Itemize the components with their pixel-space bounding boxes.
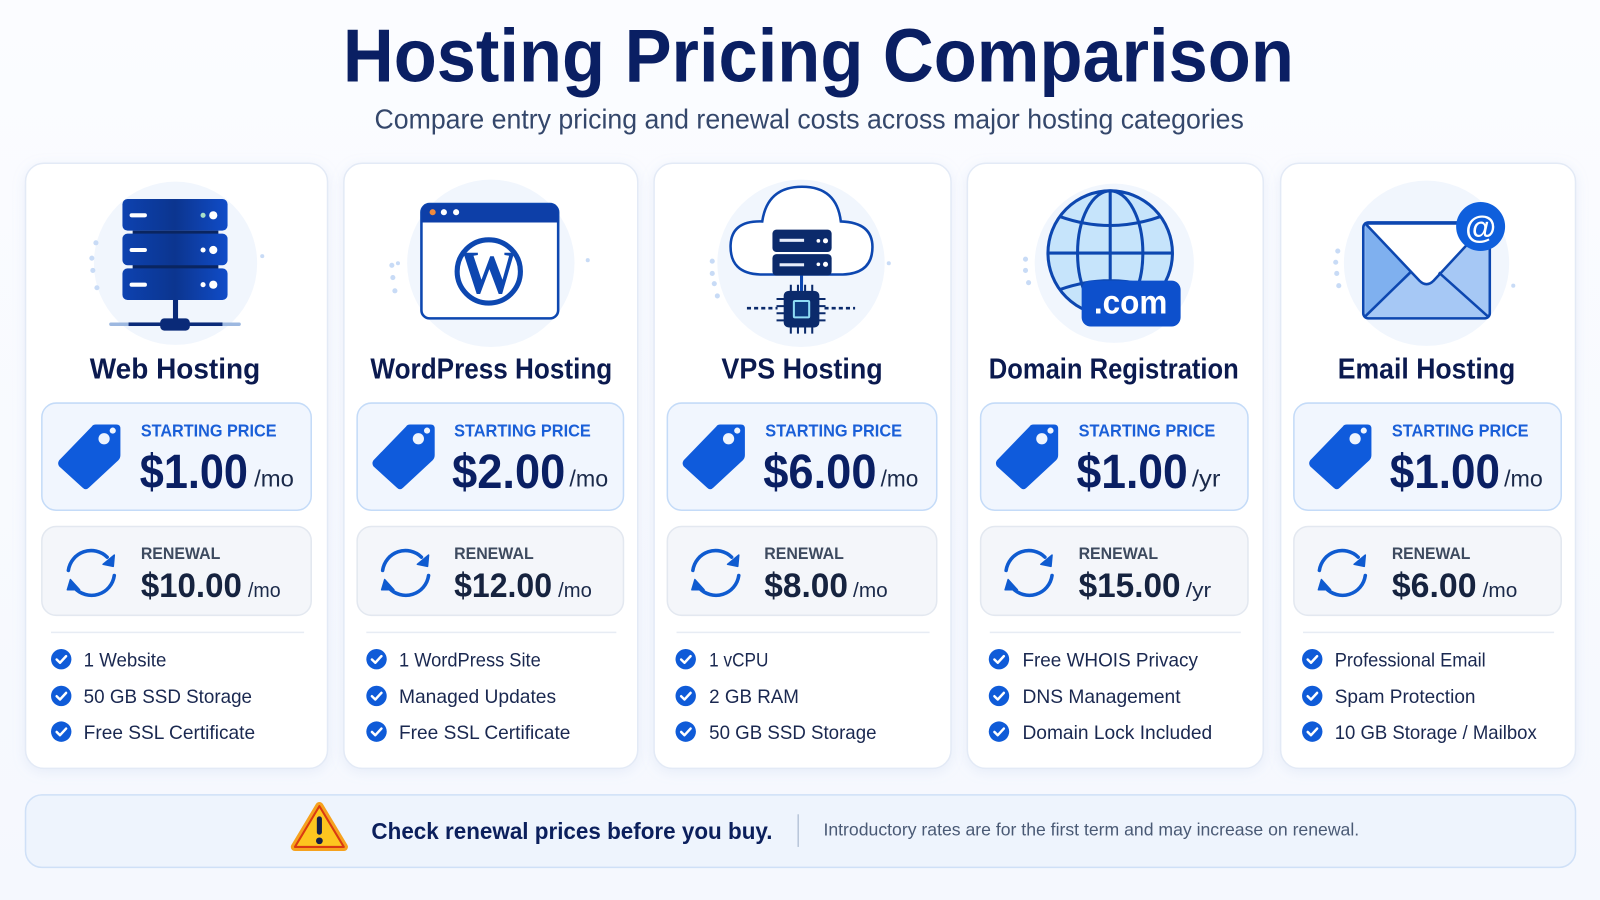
renewal box bbox=[1294, 527, 1561, 615]
renewal box: RENEWAL bbox=[764, 545, 844, 563]
feature list bbox=[51, 649, 255, 744]
starting price box: $6.00 bbox=[763, 446, 877, 499]
icon: envelope with at badge: @ bbox=[1465, 209, 1496, 245]
panel: VPS Hosting bbox=[654, 163, 951, 768]
feature list: 50 GB SSD Storage bbox=[709, 722, 877, 744]
starting price box bbox=[667, 403, 937, 510]
heading: Domain Registration bbox=[989, 354, 1239, 386]
renewal box: /mo bbox=[853, 580, 888, 602]
renewal box bbox=[357, 527, 623, 615]
callout detail: Introductory rates are for the first term and may increase on renewal. bbox=[823, 820, 1359, 840]
feature list bbox=[676, 649, 877, 744]
feature list: Professional Email bbox=[1335, 649, 1486, 671]
heading: VPS Hosting bbox=[721, 354, 883, 386]
starting price box: STARTING PRICE bbox=[1392, 421, 1529, 441]
renewal box: $8.00 bbox=[764, 567, 848, 605]
feature list: 1 Website bbox=[84, 649, 166, 671]
feature list: Domain Lock Included bbox=[1022, 722, 1212, 744]
renewal box: $10.00 bbox=[141, 567, 242, 605]
starting price box: STARTING PRICE bbox=[765, 421, 902, 441]
icon: cloud server and chip bbox=[710, 180, 891, 347]
renewal box: /mo bbox=[248, 580, 281, 602]
starting price box bbox=[42, 403, 311, 510]
feature list: Free SSL Certificate bbox=[84, 722, 255, 744]
callout: renewal warning banner bbox=[26, 795, 1576, 867]
feature list: Free WHOIS Privacy bbox=[1022, 649, 1198, 671]
starting price box: STARTING PRICE bbox=[1079, 421, 1215, 441]
feature list bbox=[366, 649, 570, 744]
renewal box: $15.00 bbox=[1079, 567, 1181, 605]
renewal box bbox=[42, 527, 311, 615]
feature list: Spam Protection bbox=[1335, 686, 1476, 708]
starting price box: /mo bbox=[569, 466, 608, 492]
starting price box: $1.00 bbox=[1077, 446, 1188, 499]
subtitle: Compare entry pricing and renewal costs across major hosting categories bbox=[374, 104, 1244, 135]
starting price box bbox=[981, 403, 1248, 510]
feature list bbox=[989, 649, 1212, 744]
panel: Email Hosting bbox=[1281, 163, 1576, 768]
panel: Domain Registration bbox=[967, 163, 1263, 768]
renewal box: /yr bbox=[1186, 580, 1211, 602]
starting price box bbox=[1294, 403, 1561, 510]
feature list: Free SSL Certificate bbox=[399, 722, 570, 744]
starting price box: $2.00 bbox=[452, 446, 565, 499]
heading: Web Hosting bbox=[90, 354, 260, 386]
renewal box: RENEWAL bbox=[1392, 545, 1470, 563]
renewal box: RENEWAL bbox=[454, 545, 534, 563]
starting price box: STARTING PRICE bbox=[454, 421, 591, 441]
renewal box bbox=[981, 527, 1248, 615]
renewal box: $12.00 bbox=[454, 567, 552, 605]
starting price box: STARTING PRICE bbox=[141, 421, 277, 441]
icon: globe with .com badge bbox=[1023, 184, 1194, 343]
starting price box: /mo bbox=[881, 466, 918, 492]
feature list: DNS Management bbox=[1022, 686, 1181, 708]
icon: warning triangle bbox=[295, 806, 344, 847]
icon: browser with WordPress logo: W bbox=[460, 239, 517, 307]
feature list bbox=[1302, 649, 1537, 744]
renewal box: RENEWAL bbox=[141, 545, 220, 563]
feature list: 2 GB RAM bbox=[709, 686, 799, 708]
feature list: 50 GB SSD Storage bbox=[84, 686, 252, 708]
heading: Email Hosting bbox=[1338, 354, 1515, 386]
title: Hosting Pricing Comparison bbox=[343, 15, 1294, 99]
starting price box: /mo bbox=[254, 466, 294, 492]
icon: browser with WordPress logo bbox=[389, 180, 590, 347]
feature list: 10 GB Storage / Mailbox bbox=[1335, 722, 1537, 744]
icon: globe with .com badge: .com bbox=[1094, 284, 1167, 321]
icon: envelope with at badge bbox=[1333, 181, 1515, 346]
feature list: 1 vCPU bbox=[709, 649, 768, 671]
icon: server rack bbox=[89, 182, 264, 345]
renewal box: /mo bbox=[1483, 580, 1517, 602]
starting price box: /mo bbox=[1504, 466, 1543, 492]
feature list: 1 WordPress Site bbox=[399, 649, 541, 671]
starting price box bbox=[357, 403, 623, 510]
renewal box: RENEWAL bbox=[1079, 545, 1158, 563]
panel: WordPress Hosting bbox=[344, 163, 638, 768]
renewal box: $6.00 bbox=[1392, 567, 1477, 605]
heading: WordPress Hosting bbox=[370, 354, 612, 386]
callout heading: Check renewal prices before you buy. bbox=[371, 818, 772, 844]
renewal box bbox=[667, 527, 937, 615]
starting price box: $1.00 bbox=[140, 446, 248, 499]
renewal box: /mo bbox=[558, 580, 592, 602]
starting price box: $1.00 bbox=[1390, 446, 1500, 499]
panel: Web Hosting bbox=[26, 163, 328, 768]
feature list: Managed Updates bbox=[399, 686, 556, 708]
starting price box: /yr bbox=[1192, 466, 1221, 492]
